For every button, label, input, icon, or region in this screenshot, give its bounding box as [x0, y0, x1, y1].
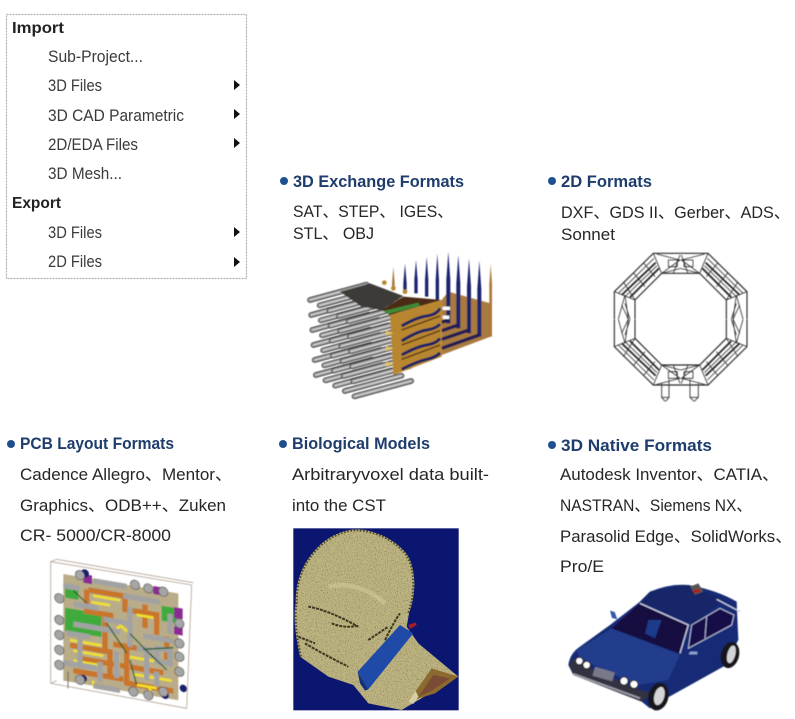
text block: DXF、GDS II、Gerber、ADS、: [561, 203, 790, 222]
bullet: [548, 177, 556, 185]
menu item: export 3D Files: 3D Files: [48, 224, 102, 242]
bullet: [7, 440, 15, 448]
panel: Biological Models: [279, 435, 489, 710]
heading: 3D Exchange Formats: [293, 173, 464, 191]
menu item: 2D/EDA Files: 2D/EDA Files: [48, 136, 138, 154]
text block line 2: Sonnet: [561, 225, 615, 244]
text block: SAT、STEP、 IGES、: [293, 202, 453, 221]
image: PCB layout model: [51, 559, 193, 708]
image: octagonal coil mesh: [614, 253, 747, 401]
heading: PCB Layout Formats: [20, 435, 174, 453]
menu item: 3D Mesh: 3D Mesh...: [48, 165, 122, 183]
menu heading: Import: Import: [12, 20, 65, 37]
image: voxel head with phone: [293, 528, 459, 710]
panel: 2D Formats: [548, 173, 790, 401]
text block line 2: STL、 OBJ: [293, 224, 374, 243]
image: connector model: [310, 252, 492, 396]
text block line 2: NASTRAN、Siemens NX、: [560, 496, 752, 515]
text block line 2: Graphics、ODB++、Zuken: [20, 496, 226, 515]
image: blue car model: [568, 583, 742, 713]
text block line 2: into the CST: [292, 496, 386, 515]
panel: import and export menu: [6, 14, 246, 278]
heading: 3D Native Formats: [561, 437, 712, 455]
menu item: 3D Files: 3D Files: [48, 77, 102, 95]
bullet: [548, 441, 556, 449]
text block line 3: CR- 5000/CR-8000: [20, 526, 171, 545]
bullet: [280, 177, 288, 185]
menu item: 3D CAD Parametric: 3D CAD Parametric: [48, 107, 184, 125]
panel: 3D Native Formats: [548, 437, 792, 713]
text block: Cadence Allegro、Mentor、: [20, 465, 232, 484]
menu item: export 2D Files: 2D Files: [48, 253, 102, 271]
icon: submenu arrows: [234, 80, 240, 267]
text block: Arbitraryvoxel data built-: [292, 465, 489, 484]
text block: Autodesk Inventor、CATIA、: [560, 465, 779, 484]
menu item: Sub-Project: Sub-Project...: [48, 48, 143, 66]
heading: Biological Models: [292, 435, 430, 453]
bullet: [279, 440, 287, 448]
text block line 3: Parasolid Edge、SolidWorks、: [560, 527, 792, 546]
panel: PCB Layout Formats: [7, 435, 232, 708]
menu heading: Export: Export: [12, 195, 62, 212]
panel: 3D Exchange Formats: [280, 173, 492, 396]
heading: 2D Formats: [561, 173, 652, 191]
text block line 4: Pro/E: [560, 557, 604, 576]
